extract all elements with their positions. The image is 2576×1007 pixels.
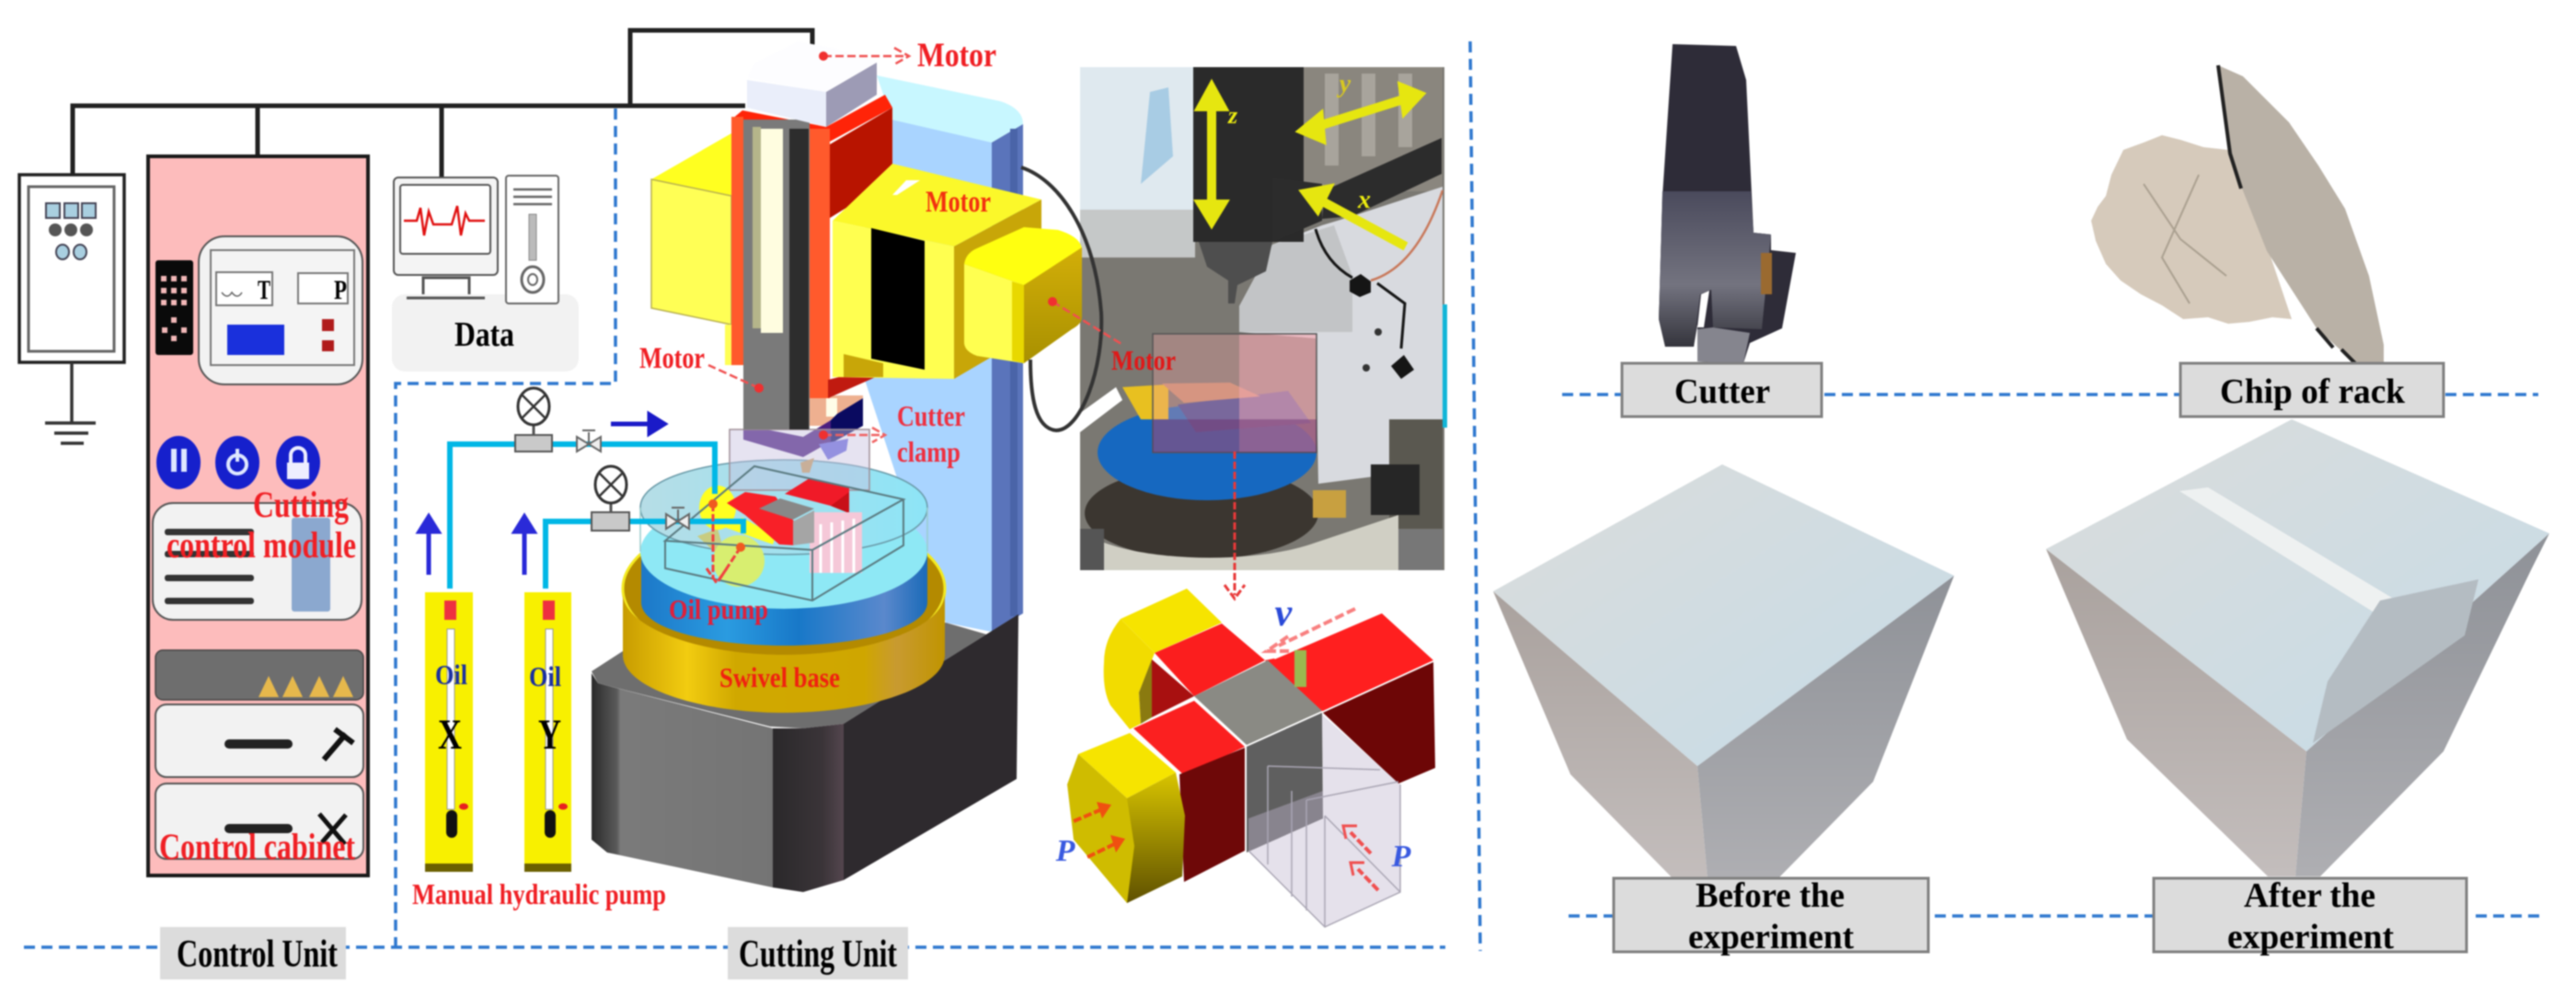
gauge and valve upper xyxy=(515,388,601,452)
3D clamp view: P xyxy=(1391,840,1411,874)
label: manual hydraulic pump: Manual hydraulic pump xyxy=(412,877,666,910)
top motor cap xyxy=(747,41,877,127)
rotary table xyxy=(640,460,927,646)
wiring bus xyxy=(73,30,812,177)
label: cutter clamp: Cutter xyxy=(897,399,965,432)
photo: cutter xyxy=(1659,44,1796,363)
arrow: oil pump pointer xyxy=(707,499,745,583)
label: cutter clamp xyxy=(819,399,965,468)
label: before the experiment xyxy=(1569,876,2546,956)
red spindle housing xyxy=(731,95,892,429)
label: motor photo side: Motor xyxy=(1111,344,1176,376)
photo of machine: x xyxy=(1357,186,1371,214)
3D clamp view xyxy=(1055,589,1435,927)
hydraulic pipes xyxy=(450,444,743,589)
panel: control cabinet: Control cabinet xyxy=(159,826,356,867)
arrow: photo to 3D view xyxy=(1225,452,1245,599)
label: motor top xyxy=(819,37,996,74)
right yellow carriage: Motor xyxy=(926,186,991,219)
label: cutter: Cutter xyxy=(1674,372,1770,411)
photo of machine: y xyxy=(1337,70,1351,98)
electrical box with ground xyxy=(19,175,124,443)
label: before the experiment: experiment xyxy=(1688,918,1854,956)
panel: control cabinet: T xyxy=(258,275,270,305)
pump X: Oil xyxy=(435,658,467,691)
machine column xyxy=(865,75,1023,632)
swivel base: Swivel base xyxy=(719,661,840,693)
label: chip of rack: Chip of rack xyxy=(2220,372,2406,411)
left yellow block xyxy=(651,133,732,365)
label: motor photo side xyxy=(1048,297,1176,376)
photo: chip of rock xyxy=(2091,65,2384,363)
photo of machine xyxy=(1076,67,1447,570)
label: cutter clamp: clamp xyxy=(897,435,960,468)
label: chip of rack xyxy=(2180,363,2444,417)
pump X: X xyxy=(438,711,462,759)
label: motor top: Motor xyxy=(917,37,996,74)
machine base xyxy=(592,614,1018,892)
label: cutting unit xyxy=(728,927,908,979)
icon: data computer: Data xyxy=(454,315,514,354)
dashed frame xyxy=(24,41,1480,951)
motor end xyxy=(964,227,1082,363)
label: motor spindle: Motor xyxy=(639,342,705,375)
label: cutter xyxy=(1562,363,2538,417)
cable xyxy=(1021,167,1101,430)
photo of machine: z xyxy=(1227,102,1238,129)
label: after the experiment: After the xyxy=(2244,876,2375,915)
pump X xyxy=(425,592,473,872)
photo: rock before the experiment xyxy=(1493,464,1954,878)
rotary table: Oil pump xyxy=(669,593,768,625)
label: control unit xyxy=(160,927,346,979)
label: control unit: Control Unit xyxy=(177,933,338,976)
spindle lower end xyxy=(730,395,869,490)
workpiece fixture xyxy=(665,466,903,601)
panel: control cabinet xyxy=(148,156,368,875)
label: after the experiment xyxy=(2154,876,2467,956)
pump Y: Oil xyxy=(529,660,561,692)
pump Y: Y xyxy=(538,711,561,759)
swivel base xyxy=(623,513,945,713)
3D clamp view: v xyxy=(1275,592,1294,635)
panel: control cabinet: Cutting xyxy=(253,484,349,525)
panel: control cabinet: P xyxy=(334,275,347,305)
photo: rock after the experiment xyxy=(2046,419,2549,876)
panel: control cabinet: control module xyxy=(167,524,356,566)
3D clamp view: P xyxy=(1055,834,1075,868)
arrows: flow direction xyxy=(420,415,664,575)
label: motor spindle xyxy=(639,342,764,393)
label: after the experiment: experiment xyxy=(2227,918,2394,956)
label: cutting unit: Cutting Unit xyxy=(739,933,897,976)
label: before the experiment: Before the xyxy=(1696,876,1845,915)
icon: data computer xyxy=(392,176,579,372)
gauge and valve lower xyxy=(592,466,689,531)
pump Y xyxy=(524,592,571,872)
right yellow carriage xyxy=(833,164,1041,379)
